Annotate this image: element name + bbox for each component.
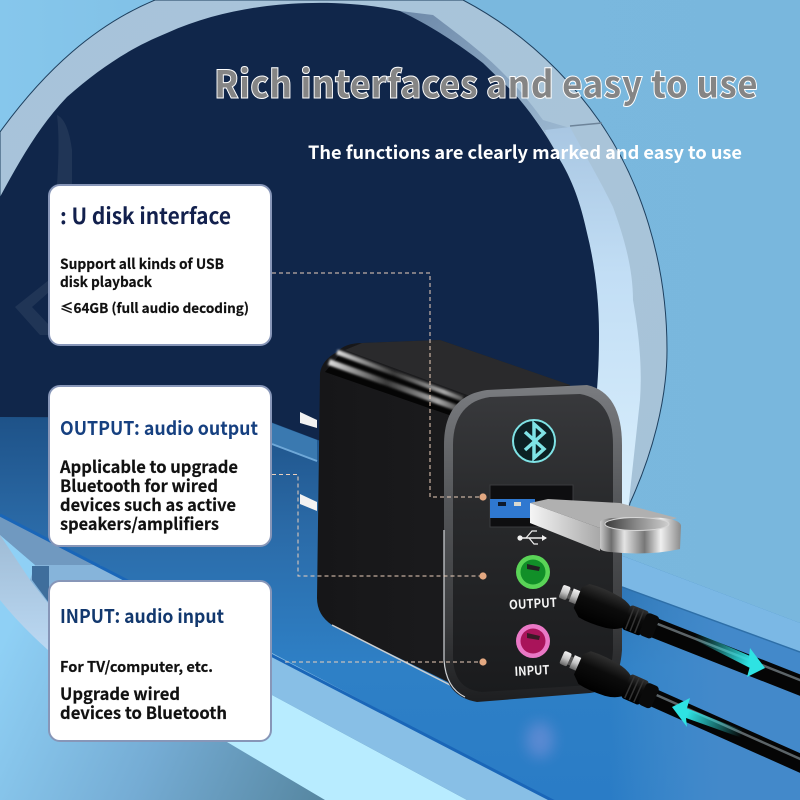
output audio plug and cable bbox=[554, 574, 800, 711]
background: shelf bbox=[0, 417, 800, 800]
label: OUTPUT: OUTPUT bbox=[508, 592, 558, 613]
panel: U disk interface bbox=[49, 185, 271, 345]
leader line: input bbox=[285, 658, 487, 666]
label: INPUT: INPUT bbox=[514, 659, 550, 680]
text: input description: Upgrade wired bbox=[60, 681, 180, 705]
text: input description: devices to Bluetooth bbox=[60, 700, 227, 724]
USB port bbox=[490, 485, 573, 527]
panel: INPUT bbox=[49, 581, 271, 741]
text: input description bbox=[60, 656, 227, 724]
USB flash drive bbox=[530, 499, 681, 553]
leader line: USB bbox=[272, 273, 487, 501]
heading: OUTPUT audio output: OUTPUT: audio output bbox=[60, 414, 258, 441]
text: output description: speakers/amplifiers bbox=[60, 511, 219, 535]
subtitle: The functions are clearly marked and easy to use bbox=[308, 139, 742, 165]
heading: U disk interface: : U disk interface bbox=[60, 199, 231, 231]
text: output description bbox=[59, 454, 238, 535]
charger body bbox=[317, 340, 570, 697]
text: USB support bbox=[60, 254, 249, 317]
text: output description: Applicable to upgrade bbox=[59, 454, 238, 478]
leader line: output bbox=[272, 474, 487, 580]
arrow: signal in bbox=[672, 698, 742, 738]
icon: bluetooth bbox=[513, 420, 555, 462]
background: glass ring bbox=[0, 0, 667, 600]
text: USB support: disk playback bbox=[60, 272, 153, 292]
text: output description: devices such as active bbox=[60, 492, 236, 516]
icon: USB symbol bbox=[517, 531, 547, 544]
text: input description: For TV/computer, etc. bbox=[60, 656, 213, 677]
heading: INPUT audio input: INPUT: audio input bbox=[60, 602, 224, 629]
input jack bbox=[516, 624, 550, 658]
charger front plate bbox=[444, 385, 622, 702]
text: USB support: Support all kinds of USB bbox=[60, 254, 224, 274]
plug prongs bbox=[300, 412, 317, 511]
input audio plug and cable bbox=[554, 641, 800, 792]
text: USB support: ≤64GB (full audio decoding) bbox=[60, 297, 249, 317]
panel: OUTPUT bbox=[49, 386, 271, 546]
arrow: signal out bbox=[695, 632, 765, 677]
output jack bbox=[516, 555, 550, 589]
text: output description: Bluetooth for wired bbox=[60, 473, 218, 497]
title: Rich interfaces and easy to use bbox=[214, 54, 758, 109]
background: dark disc bbox=[0, 3, 599, 600]
